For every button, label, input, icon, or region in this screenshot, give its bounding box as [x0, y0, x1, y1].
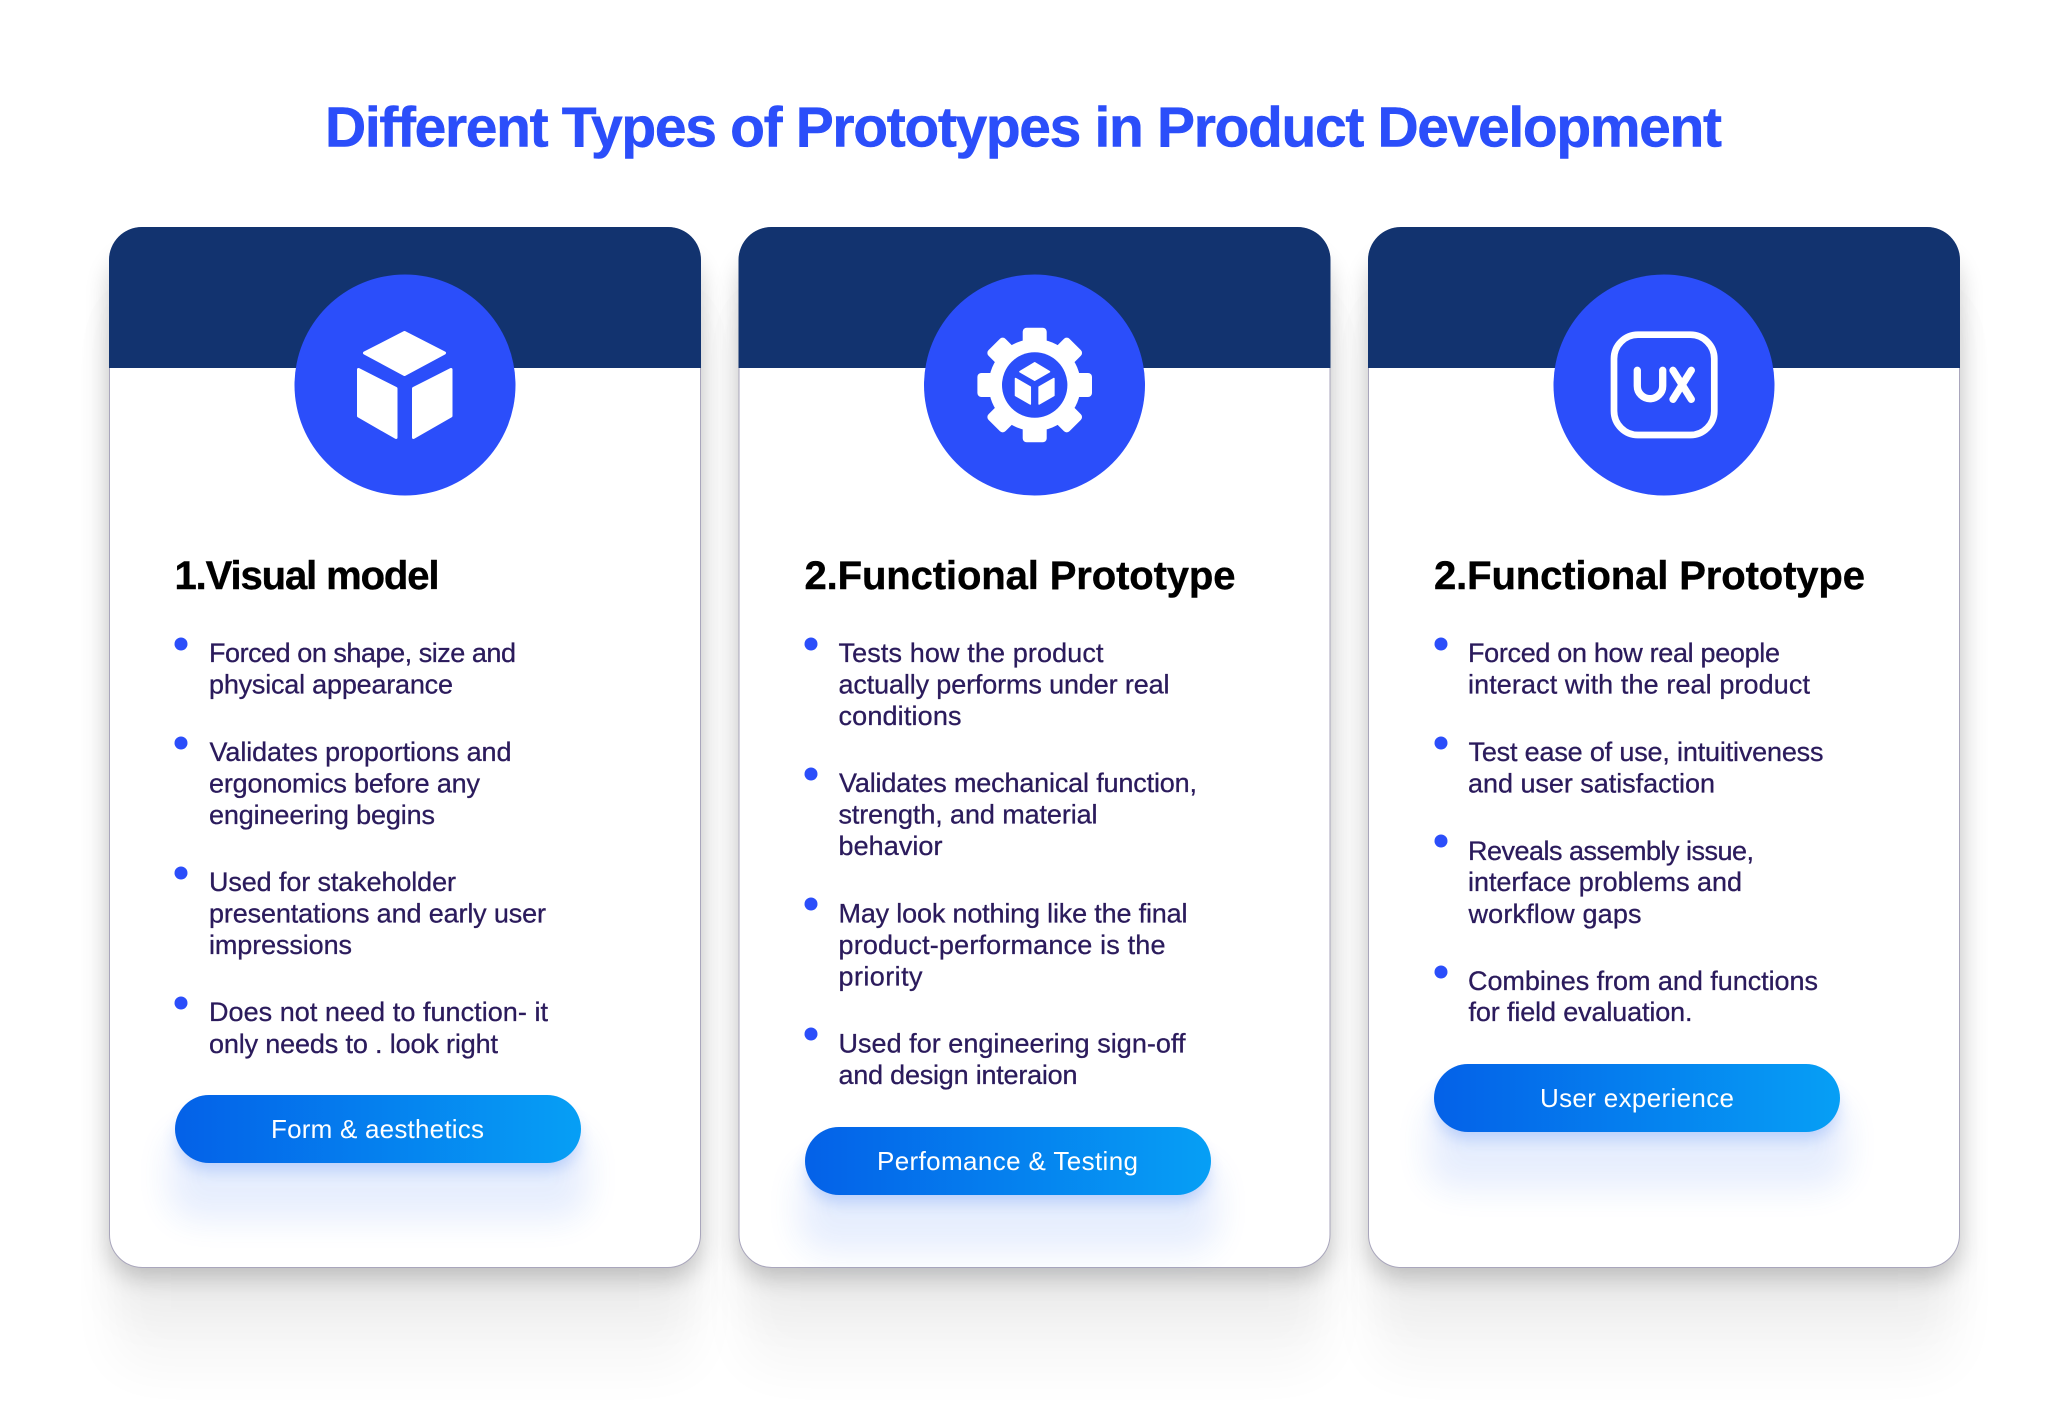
button: form and aesthetics: Form & aesthetics — [271, 1114, 484, 1144]
panel: functional prototype user experience — [1368, 227, 1960, 1268]
button: performance and testing — [805, 1127, 1211, 1195]
bullet list: physical appearance — [209, 670, 453, 700]
bullet list: Forced on how real people — [1468, 638, 1780, 668]
title: Different Types of Prototypes in Product Development — [325, 96, 1722, 160]
panel: functional prototype — [738, 227, 1330, 1268]
bullet list: strength, and material — [838, 800, 1098, 830]
bullet list: impressions — [209, 930, 352, 960]
button: user experience: User experience — [1540, 1083, 1734, 1113]
card header band — [738, 227, 1330, 368]
heading: 1.Visual model — [174, 554, 440, 598]
bullet list — [804, 638, 1197, 1090]
bullet list: and user satisfaction — [1468, 768, 1715, 798]
card body — [110, 228, 700, 1268]
bullet list: for field evaluation. — [1468, 997, 1692, 1027]
bullet list: Used for engineering sign-off — [838, 1028, 1186, 1058]
bullet list — [1434, 638, 1824, 1027]
bullet list: interface problems and — [1468, 867, 1742, 897]
bullet list: interact with the real product — [1468, 670, 1810, 700]
button: user experience — [1434, 1064, 1840, 1132]
heading: 2.Functional Prototype — [1434, 554, 1865, 598]
button: form and aesthetics — [175, 1095, 581, 1163]
bullet list: only needs to . look right — [209, 1029, 498, 1059]
bullet list: actually performs under real — [838, 670, 1170, 700]
bullet list: Test ease of use, intuitiveness — [1468, 737, 1824, 767]
bullet list: product-performance is the — [838, 930, 1166, 960]
bullet list: Validates mechanical function, — [839, 768, 1197, 798]
icon: UX — [1554, 274, 1774, 496]
heading: 2.Functional Prototype — [804, 554, 1236, 598]
bullet list: presentations and early user — [209, 898, 546, 928]
bullet list: priority — [838, 962, 923, 992]
bullet list: workflow gaps — [1468, 899, 1642, 929]
bullet list — [174, 638, 548, 1059]
panel: visual model — [109, 227, 701, 1268]
bullet list: conditions — [838, 701, 962, 731]
bullet list: behavior — [838, 831, 942, 861]
bullet list: Combines from and functions — [1468, 966, 1818, 996]
card header band — [109, 227, 701, 368]
bullet list: Reveals assembly issue, — [1468, 836, 1754, 866]
bullet list: Forced on shape, size and — [209, 638, 516, 668]
bullet list: Does not need to function- it — [209, 997, 548, 1027]
button: performance and testing: Perfomance & Testing — [877, 1146, 1138, 1176]
bullet list: Validates proportions and — [210, 737, 512, 767]
icon: cube — [294, 274, 516, 496]
icon: gear with cube — [924, 274, 1145, 496]
bullet list: Used for stakeholder — [209, 867, 456, 897]
bullet list: May look nothing like the final — [838, 898, 1188, 928]
bullet list: engineering begins — [209, 800, 435, 830]
bullet list: ergonomics before any — [209, 768, 480, 798]
card body — [1368, 228, 1960, 1268]
bullet list: Tests how the product — [838, 638, 1104, 668]
card body — [739, 228, 1330, 1268]
bullet list: and design interaion — [838, 1060, 1078, 1090]
card header band — [1368, 227, 1960, 368]
